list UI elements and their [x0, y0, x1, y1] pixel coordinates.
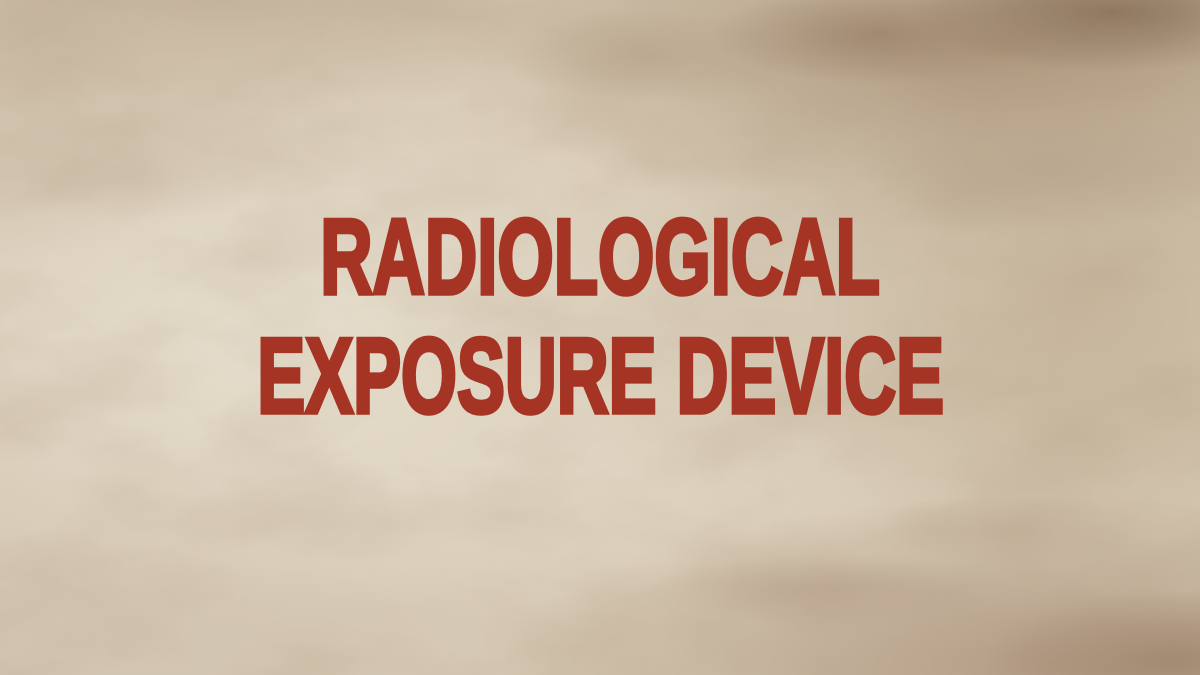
- title line 1: RADIOLOGICAL: [320, 197, 880, 317]
- title: [257, 197, 944, 436]
